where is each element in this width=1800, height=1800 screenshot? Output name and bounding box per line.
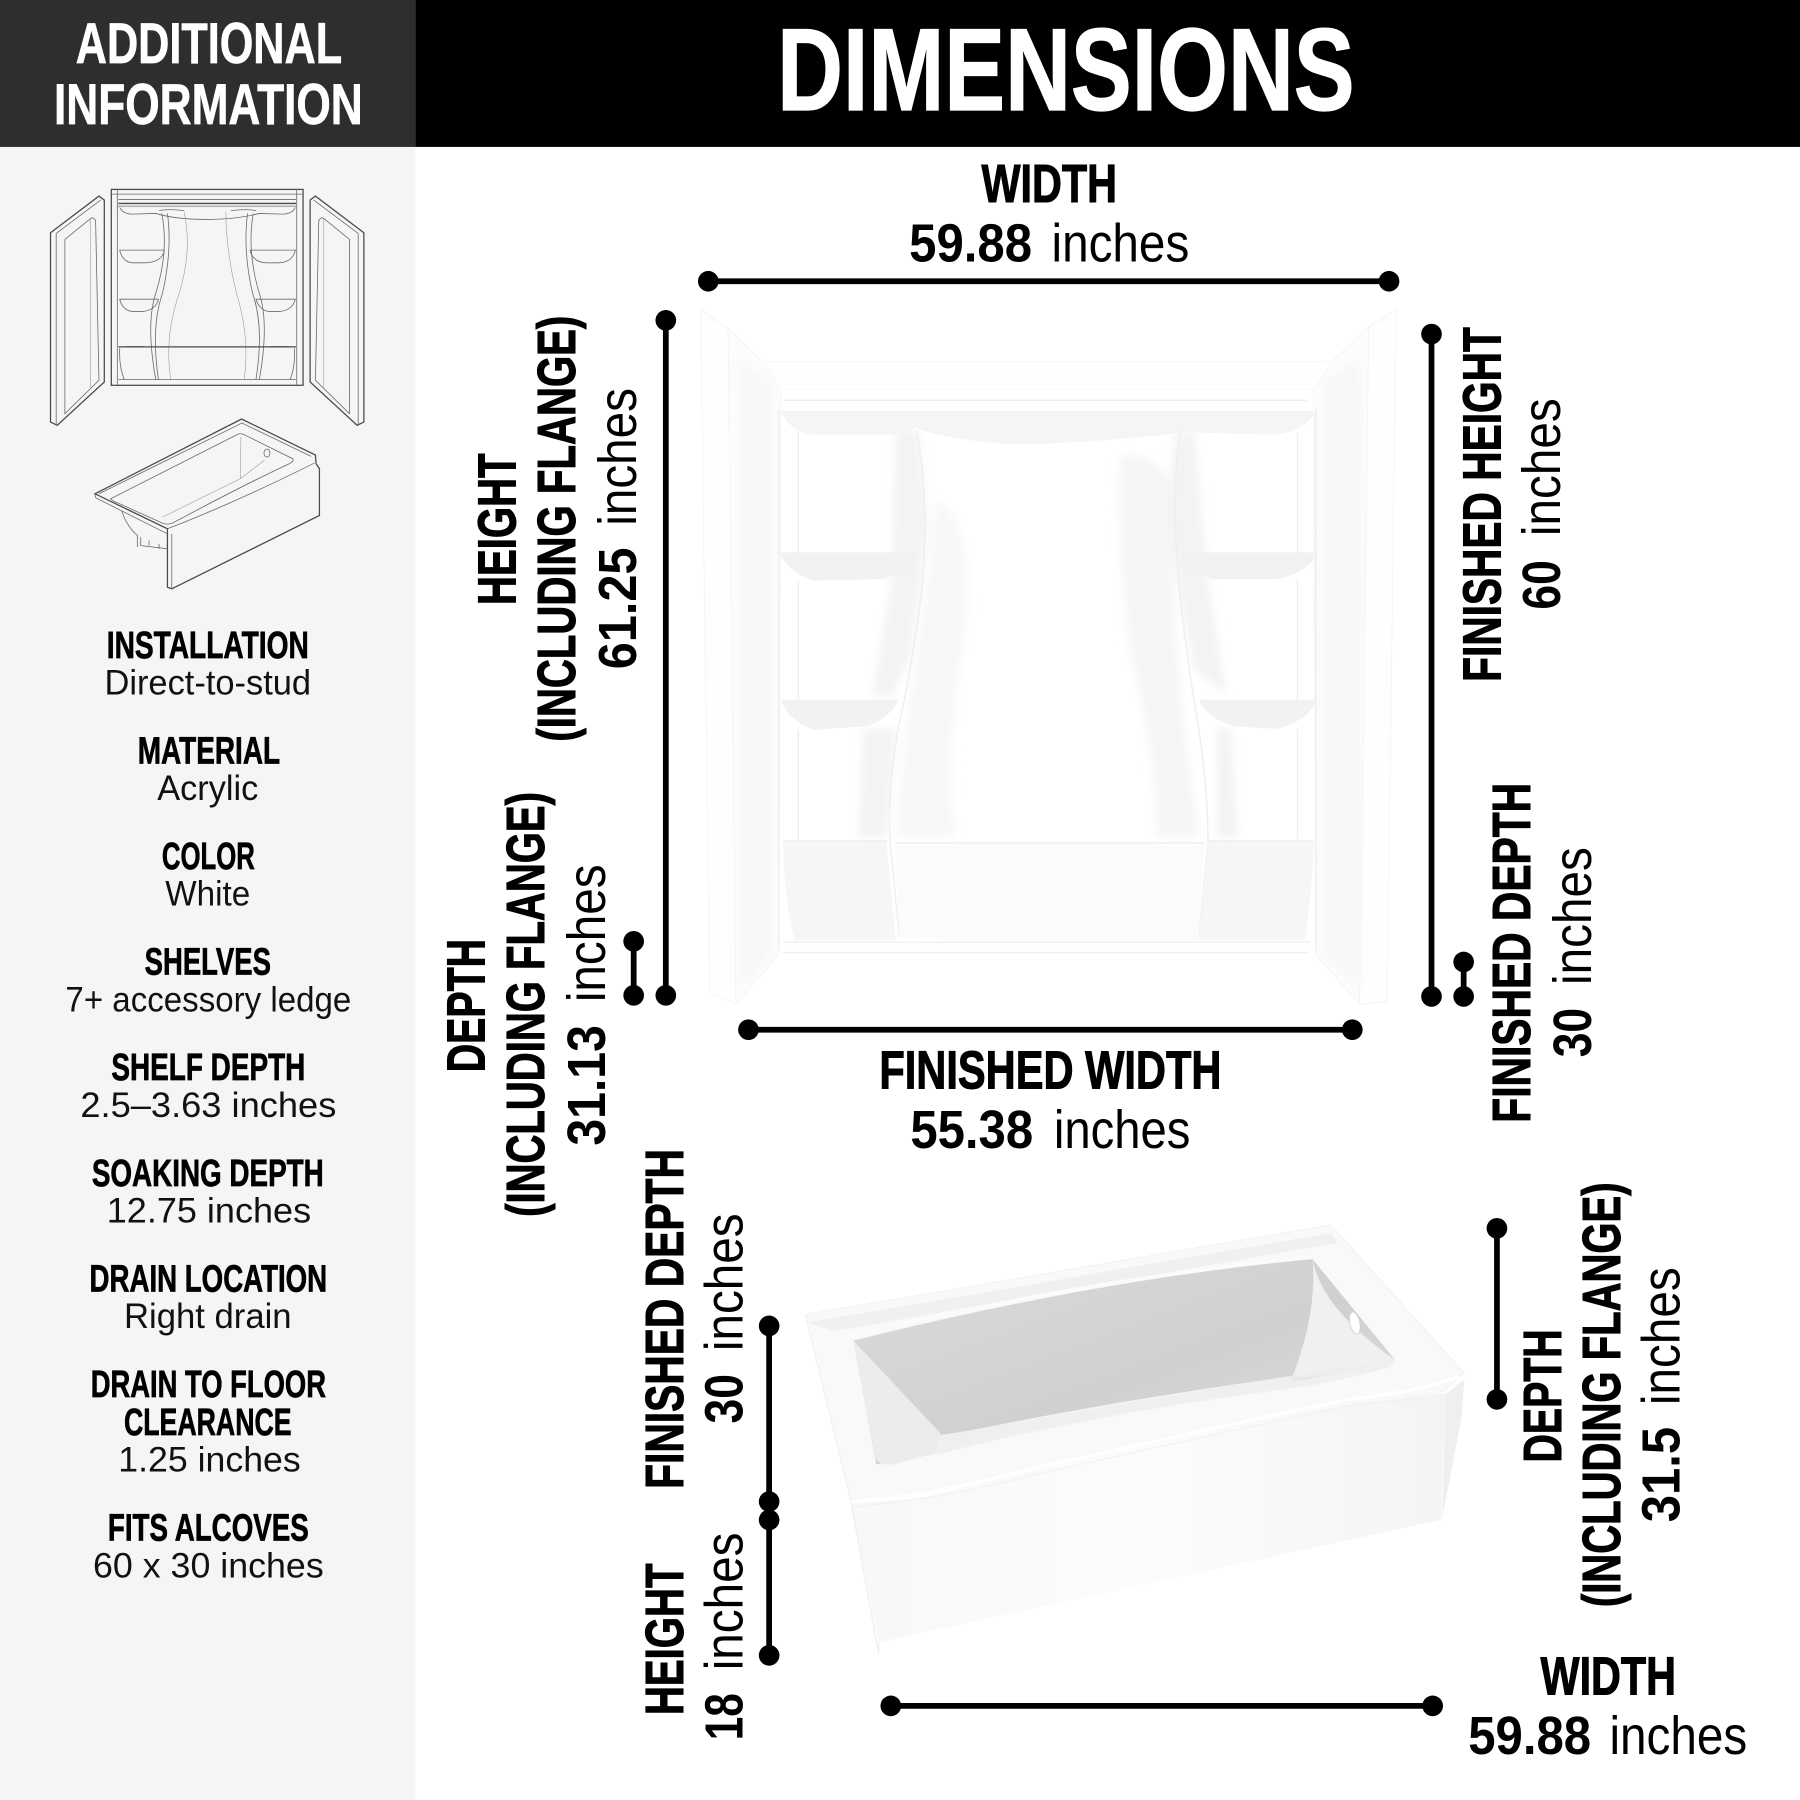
title: DIMENSIONS [777, 4, 1355, 135]
panel: sidebar background [0, 147, 416, 1800]
shower shelf: left lower [780, 700, 899, 730]
spec: drain to floor clearance [91, 1364, 326, 1480]
value: 61.25 inches: 61.25 [588, 548, 648, 669]
value: 18 inches [695, 1533, 755, 1740]
value: 55.38 inches [910, 1100, 1190, 1160]
spec: installation [104, 625, 311, 703]
value: tub 30 inches [695, 1213, 755, 1423]
spec: shelves: 7+ accessory ledge [65, 979, 351, 1019]
spec: installation: INSTALLATION [107, 625, 309, 667]
value: 60 inches: inches [1512, 398, 1572, 536]
value: 30 inches: 30 [1543, 1008, 1603, 1057]
arrow: depth bar [623, 931, 644, 1006]
spec: soaking depth [92, 1153, 324, 1231]
value: tub 59.88 inches: inches [1609, 1706, 1747, 1766]
label: finished depth: FINISHED DEPTH [1482, 783, 1542, 1123]
value: tub 30 inches: 30 [695, 1374, 755, 1423]
value: 60 inches [1512, 398, 1572, 610]
value: 59.88 inches: inches [1052, 214, 1189, 274]
label: height including flange: HEIGHT [467, 453, 527, 605]
spec: shelf depth: SHELF DEPTH [111, 1047, 305, 1089]
label: tub height: HEIGHT [635, 1563, 695, 1715]
spec: drain to floor clearance: CLEARANCE [124, 1402, 292, 1444]
spec: drain to floor clearance: DRAIN TO FLOOR [91, 1364, 326, 1406]
value: 61.25 inches: inches [588, 388, 648, 526]
shower shelf: left upper [779, 552, 920, 581]
label: height including flange: (INCLUDING FLANGE) [527, 316, 587, 742]
shower shelf: top [781, 411, 1316, 444]
arrow: finished width bar [738, 1019, 1363, 1040]
label: tub finished depth: FINISHED DEPTH [635, 1149, 695, 1489]
shower shelf: right lower [1199, 700, 1317, 729]
value: 55.38 inches: inches [1054, 1100, 1190, 1160]
tub height dimension [635, 1510, 779, 1740]
label: tub width: WIDTH [1541, 1646, 1676, 1706]
tub front apron [851, 1393, 1446, 1642]
width dimension [698, 154, 1399, 292]
label: tub depth including flange: DEPTH [1513, 1329, 1573, 1463]
value: tub 30 inches: inches [695, 1213, 755, 1351]
value: tub 59.88 inches [1468, 1706, 1747, 1766]
heading: additional information: ADDITIONAL [76, 12, 342, 76]
spec: shelf depth: 2.5–3.63 inches [80, 1085, 336, 1125]
spec: shelf depth [80, 1047, 336, 1125]
value: 30 inches [1543, 847, 1603, 1057]
spec: material [138, 730, 280, 808]
value: 31.5 inches: inches [1631, 1267, 1691, 1405]
value: 31.5 inches [1631, 1267, 1691, 1522]
spec: fits alcoves [93, 1508, 324, 1585]
spec: material: Acrylic [157, 768, 258, 808]
finished height dimension [1421, 324, 1572, 1007]
drain overflow hole [1348, 1312, 1362, 1334]
label: depth including flange [436, 792, 556, 1217]
tub depth including flange dimension [1487, 1182, 1691, 1607]
spec: drain location: DRAIN LOCATION [90, 1258, 327, 1300]
height including flange dimension [467, 310, 676, 1006]
label: tub depth including flange: (INCLUDING FLANGE) [1572, 1182, 1632, 1607]
spec: installation: Direct-to-stud [104, 663, 311, 703]
arrow: tub depth bar [1487, 1218, 1507, 1410]
finished width dimension [738, 1019, 1363, 1160]
spec: shelves [65, 942, 351, 1019]
value: tub 59.88 inches: 59.88 [1468, 1706, 1591, 1766]
arrow: tub width bar [880, 1696, 1443, 1716]
label: height including flange [467, 316, 587, 742]
icon: line drawing of wall surround and tub [51, 189, 364, 589]
value: 55.38 inches: 55.38 [910, 1100, 1033, 1160]
spec: soaking depth: SOAKING DEPTH [92, 1153, 324, 1195]
arrow: tub finished depth bar [759, 1316, 779, 1512]
arrow: width bar [698, 271, 1399, 292]
spec: drain location [90, 1258, 327, 1336]
spec: material: MATERIAL [138, 730, 280, 772]
arrow: finished depth bar [1453, 952, 1474, 1007]
heading: additional information: INFORMATION [54, 73, 363, 137]
spec: soaking depth: 12.75 inches [107, 1191, 311, 1231]
value: 31.5 inches: 31.5 [1631, 1427, 1691, 1522]
arrow: tub height bar [759, 1510, 779, 1666]
value: 31.13 inches: 31.13 [557, 1025, 617, 1146]
panel: additional information header [0, 0, 416, 147]
left wall panel line art [51, 196, 104, 425]
product image: white bathtub [805, 1225, 1464, 1654]
spec: shelves: SHELVES [145, 942, 271, 984]
label: tub depth including flange [1513, 1182, 1632, 1607]
spec: color: White [165, 874, 250, 914]
value: 59.88 inches: 59.88 [909, 214, 1032, 274]
tub finished depth dimension [635, 1149, 779, 1512]
right wall panel line art [310, 196, 364, 425]
heading: additional information [54, 12, 363, 137]
surround depth including flange dimension [436, 792, 644, 1217]
arrow: finished height bar [1421, 324, 1442, 1007]
panel: dimensions header [416, 0, 1800, 147]
shower lower tub apron [783, 841, 1314, 952]
label: depth including flange: (INCLUDING FLANGE) [496, 792, 556, 1217]
value: 18 inches: inches [695, 1533, 755, 1670]
spec: color [162, 836, 255, 914]
value: 61.25 inches [588, 388, 648, 669]
wall surround back panel line art [111, 189, 303, 385]
tub line art [95, 419, 319, 589]
value: 30 inches: inches [1543, 847, 1603, 985]
spec: fits alcoves: FITS ALCOVES [108, 1508, 309, 1550]
value: 18 inches: 18 [695, 1693, 755, 1740]
label: width: WIDTH [982, 154, 1117, 214]
value: 59.88 inches [909, 214, 1189, 274]
value: 31.13 inches: inches [557, 864, 617, 1002]
spec: color: COLOR [162, 836, 255, 878]
spec: drain location: Right drain [124, 1296, 292, 1336]
arrow: height bar [655, 310, 676, 1006]
tub basin [853, 1259, 1395, 1464]
tub width dimension [880, 1646, 1747, 1766]
label: depth including flange: DEPTH [436, 939, 496, 1072]
shower shelf: right upper [1178, 552, 1318, 579]
value: 60 inches: 60 [1512, 560, 1572, 610]
tub deck [805, 1225, 1464, 1502]
product image: white wall surround [701, 310, 1396, 1004]
spec: drain to floor clearance: 1.25 inches [118, 1440, 301, 1480]
spec: fits alcoves: 60 x 30 inches [93, 1545, 324, 1585]
panel: specification list [65, 625, 351, 1585]
surround finished depth dimension [1453, 783, 1603, 1123]
label: finished height: FINISHED HEIGHT [1452, 327, 1512, 682]
value: 31.13 inches [557, 864, 617, 1146]
label: finished width: FINISHED WIDTH [879, 1040, 1221, 1100]
shower wall shading [740, 357, 1360, 988]
